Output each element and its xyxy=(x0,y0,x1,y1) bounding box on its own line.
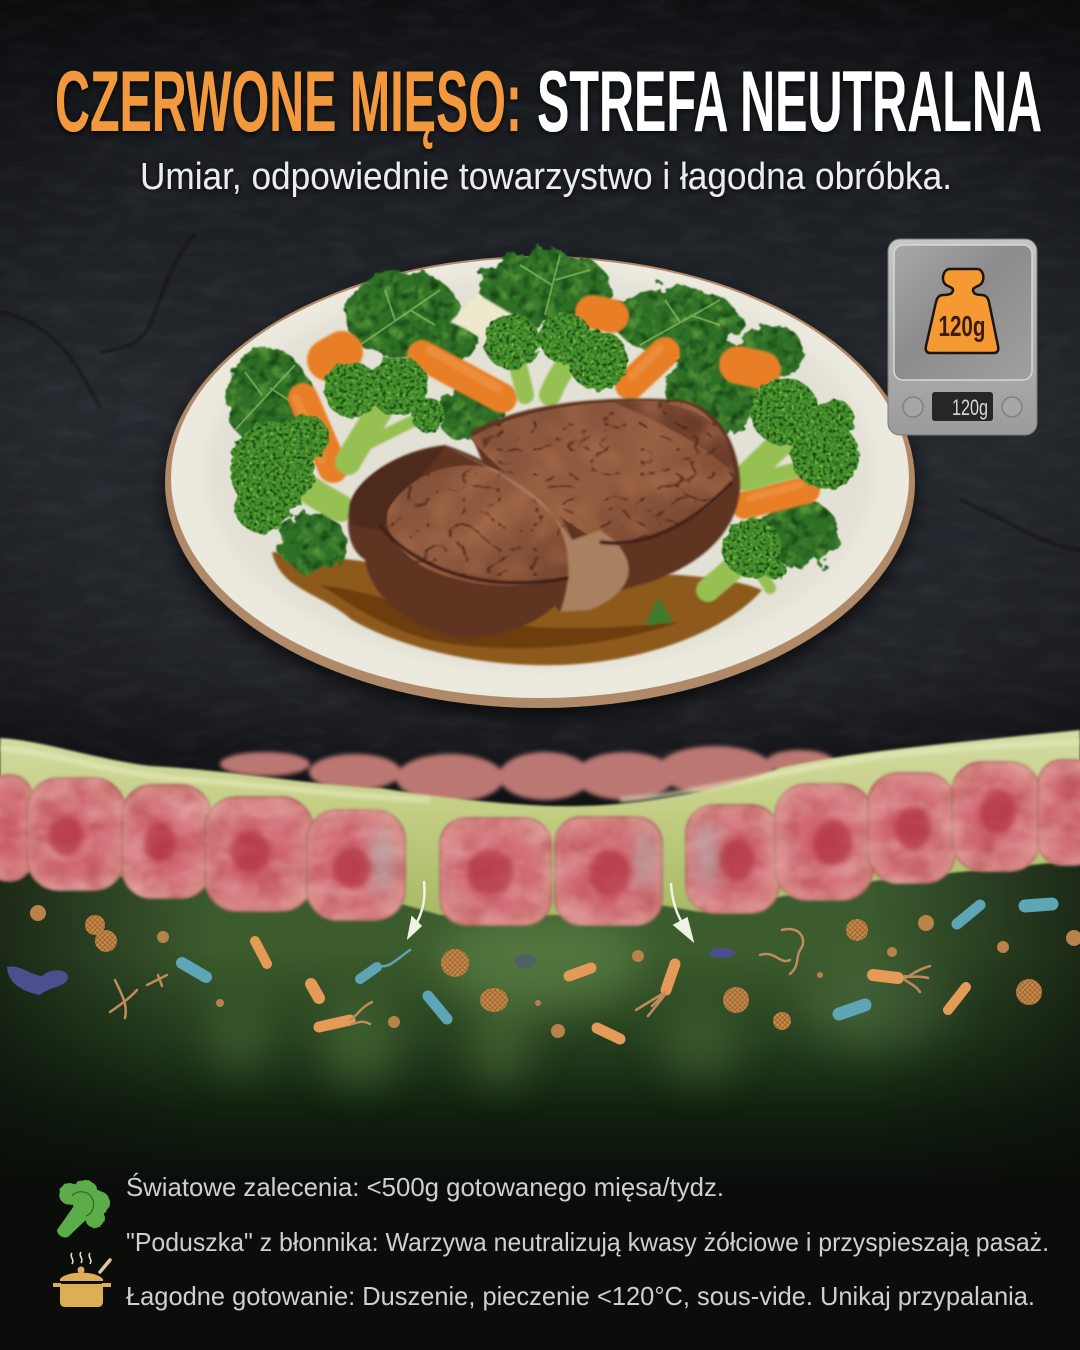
arrow: left transit xyxy=(408,882,425,938)
broccoli florets xyxy=(230,312,859,580)
digital display xyxy=(932,392,993,421)
gut bacteria xyxy=(7,904,1080,1039)
left button xyxy=(903,397,923,417)
text: fibre cushion: "Poduszka" z błonnika: Warzywa neutralizują kwasy żółciowe i przyspieszają pasaż. xyxy=(126,1227,1049,1257)
carrots xyxy=(296,312,806,505)
right button xyxy=(1002,397,1022,417)
plate xyxy=(165,256,915,708)
cell nuclei xyxy=(49,790,1016,896)
filaments and flagella xyxy=(110,929,930,1024)
icon: orange weight: 120g xyxy=(938,311,986,343)
steak xyxy=(348,399,740,638)
scale body xyxy=(888,239,1037,435)
icon: orange weight xyxy=(926,269,998,353)
plate with meat and vegetables xyxy=(165,250,915,708)
rear folds xyxy=(220,746,834,802)
pale cell patches xyxy=(369,819,720,892)
fact list xyxy=(53,1172,1049,1311)
intestine cross-section xyxy=(0,730,1080,1350)
blue rods xyxy=(182,904,1052,1019)
mucus highlights xyxy=(0,742,1080,800)
epithelial cells xyxy=(0,760,1080,925)
icon: cooking pot xyxy=(53,1252,111,1307)
right cut xyxy=(470,399,740,612)
text: gentle cooking: Łagodne gotowanie: Duszenie, pieczenie <120°C, sous-vide. Unikaj przypalania. xyxy=(126,1281,1035,1311)
small cocci xyxy=(30,905,1080,1038)
arrow: right transit xyxy=(671,884,693,941)
kale veins xyxy=(235,255,720,430)
fat seam xyxy=(445,447,629,612)
potato xyxy=(450,294,515,340)
orange rods xyxy=(255,941,966,1039)
icon: broccoli xyxy=(57,1180,110,1238)
kale leaves xyxy=(226,250,840,572)
broccoli stems xyxy=(275,340,815,590)
mucus layer xyxy=(0,730,1080,915)
gut lumen xyxy=(0,862,1080,1350)
sauce xyxy=(272,552,762,665)
digital display: 120g xyxy=(952,395,988,420)
purple microbes xyxy=(7,948,735,995)
title: CZERWONE MIĘSO: xyxy=(55,54,522,150)
round microbes xyxy=(85,915,1042,1030)
kitchen scale xyxy=(888,239,1037,435)
subtitle: Umiar, odpowiednie towarzystwo i łagodna obróbka. xyxy=(140,156,952,198)
scale platform xyxy=(894,245,1032,380)
searing shadow lines xyxy=(380,482,732,583)
text: recommendation: Światowe zalecenia: <500g gotowanego mięsa/tydz. xyxy=(126,1172,724,1202)
left cut xyxy=(348,445,575,638)
herb garnish xyxy=(645,598,673,625)
